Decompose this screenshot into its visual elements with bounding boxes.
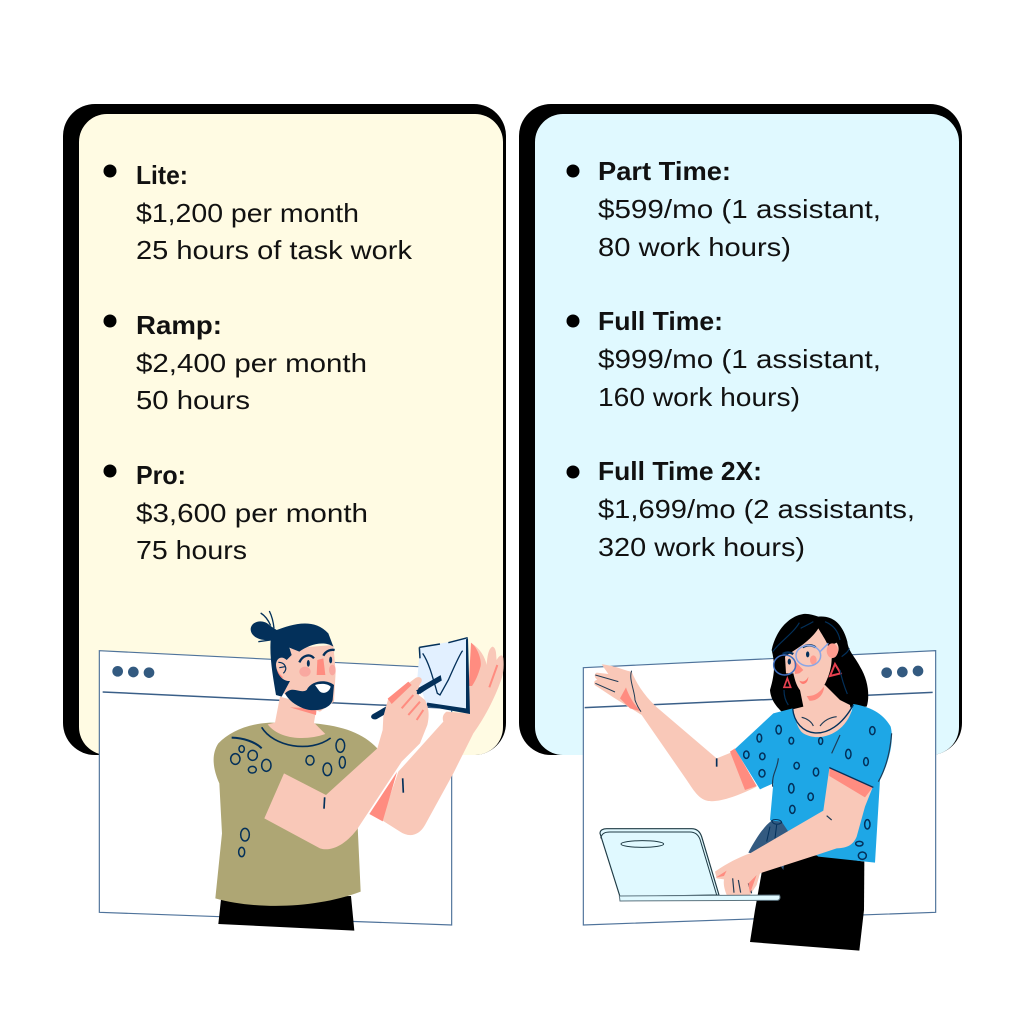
beard — [285, 681, 334, 710]
tied knot — [748, 820, 788, 870]
mouth — [799, 677, 808, 684]
hair strands — [773, 622, 849, 705]
jaw shadow — [807, 687, 824, 701]
plan: Full Time 2X: Full Time 2X: — [598, 456, 762, 486]
raised arm and hand — [594, 664, 757, 801]
neck and chest — [790, 685, 857, 750]
plan: Full Time: Full Time: — [598, 306, 723, 336]
cheeks — [299, 667, 311, 677]
plan: Lite: $1,200 per month — [136, 198, 359, 228]
pen — [372, 677, 441, 718]
head — [251, 611, 336, 712]
plan: Full Time: $999/mo (1 assistant, — [598, 344, 881, 374]
face — [785, 628, 839, 694]
plan: Ramp — [104, 310, 367, 415]
panel: right plans — [519, 104, 962, 755]
glasses — [774, 643, 828, 675]
hair and bun — [251, 621, 333, 697]
note paper — [417, 638, 470, 714]
neck — [268, 697, 325, 738]
browser window behind woman — [583, 651, 936, 925]
plan: Lite: 25 hours of task work — [136, 235, 413, 265]
mouth — [315, 684, 331, 693]
plan: Part Time: $599/mo (1 assistant, — [598, 194, 881, 224]
plan: Part Time — [566, 156, 881, 262]
plan: Full Time 2X — [566, 456, 915, 562]
ear — [274, 657, 290, 678]
panel: left plans — [63, 104, 506, 755]
blouse — [735, 704, 892, 863]
plan: Pro: Pro: — [136, 460, 186, 490]
plan: Ramp: $2,400 per month — [136, 348, 367, 378]
brows and eyes — [783, 645, 816, 654]
brows and eyes — [299, 650, 335, 662]
back arm and hand — [369, 643, 504, 835]
nose and cheek — [794, 660, 803, 674]
head — [770, 614, 868, 750]
t-shirt — [214, 723, 377, 906]
plan: Ramp: Ramp: — [136, 310, 222, 340]
plan: Full Time 2X: $1,699/mo (2 assistants, — [598, 494, 915, 524]
plan: Part Time: 80 work hours) — [598, 232, 791, 262]
front arm and hand — [264, 676, 441, 849]
nose — [317, 658, 325, 675]
plan: Pro — [104, 460, 368, 565]
illustration: man with note — [99, 611, 504, 931]
plan: Pro: $3,600 per month — [136, 498, 368, 528]
browser window behind man — [99, 651, 452, 925]
earrings — [830, 664, 841, 676]
plan: Part Time: Part Time: — [598, 156, 731, 186]
plan: Full Time — [566, 306, 881, 412]
ear — [827, 643, 838, 658]
face — [277, 645, 336, 712]
plan: Pro: 75 hours — [136, 535, 247, 565]
plan: Full Time 2X: 320 work hours) — [598, 532, 805, 562]
laptop — [600, 829, 780, 901]
front arm and hand — [715, 768, 873, 895]
plan: Lite: Lite: — [136, 160, 188, 190]
skirt — [750, 855, 864, 951]
illustration: woman with laptop — [583, 614, 936, 951]
hair — [770, 614, 868, 712]
plan: Full Time: 160 work hours) — [598, 382, 800, 412]
plan: Ramp: 50 hours — [136, 385, 250, 415]
trousers — [218, 896, 354, 931]
plan: Lite — [104, 160, 413, 265]
